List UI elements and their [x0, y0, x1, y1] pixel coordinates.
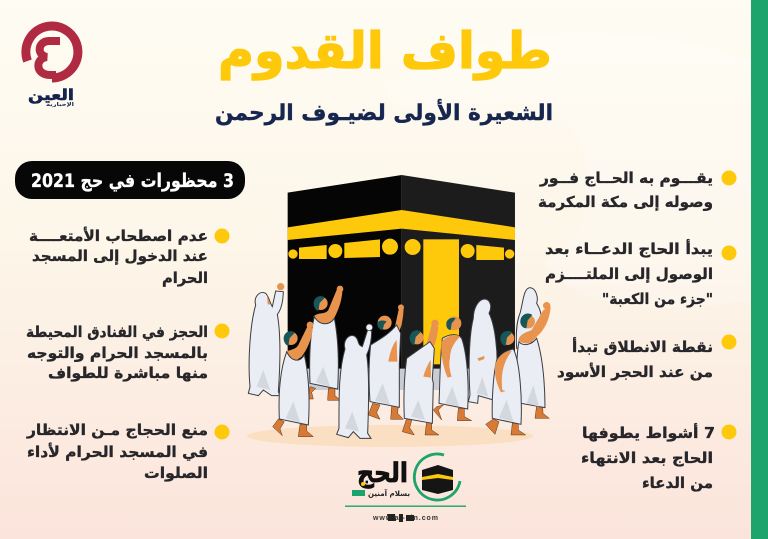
title: طواف القدوم — [218, 22, 552, 81]
step 4: 7 أشواط يطوفها — [582, 423, 715, 442]
step 2: "جزء من الكعبة" — [602, 290, 713, 308]
step 2: يبدأ الحاج الدعــاء بعد — [545, 239, 713, 258]
step 4 — [581, 423, 736, 492]
prohibition 3: منع الحجاج مـن الانتظار — [26, 421, 208, 439]
logo: Hajj safely: بسلام آمنين — [368, 488, 410, 498]
website address: www.al-ain.com — [372, 515, 438, 522]
pilgrim: woman waving — [337, 324, 373, 438]
prohibition 1: الحرام — [162, 269, 208, 287]
ground shadow — [247, 425, 533, 447]
panel: prohibitions heading — [15, 161, 245, 199]
prohibition 3: الصلوات — [144, 464, 208, 482]
pilgrim: bare shoulder right — [486, 331, 526, 435]
step 4: من الدعاء — [642, 474, 713, 492]
logo: Al-Ain: الإخبارية — [46, 102, 74, 108]
pilgrim: back woman — [516, 288, 542, 348]
prohibition 3: في المسجد الحرام لأداء — [27, 443, 208, 461]
logo: Al-Ain — [26, 26, 78, 108]
step 3: نقطة الانطلاق تبدأ — [572, 337, 713, 356]
prohibition 2 — [26, 323, 230, 382]
pilgrim: raised arm, belly showing — [368, 304, 404, 419]
pilgrim: standing woman — [468, 299, 497, 403]
prohibition 2: بالمسجد الحرام والتوجه — [27, 344, 208, 362]
step 3: من عند الحجر الأسود — [557, 363, 713, 381]
pilgrim: raised arm centre — [402, 320, 439, 435]
step 4: الحاج بعد الانتهاء — [581, 449, 713, 467]
subtitle: الشعيرة الأولى لضيـوف الرحمن — [215, 98, 553, 126]
panel: right steps list — [538, 169, 736, 492]
pilgrim: raised arm far right — [517, 302, 551, 418]
logo: Hajj safely: الحج — [357, 458, 408, 489]
prohibition 3 — [26, 421, 230, 482]
pilgrims: left group — [248, 283, 343, 437]
step 2: الوصول إلى الملتــــزم — [545, 265, 713, 283]
pilgrim: bare shoulder centre — [433, 316, 472, 421]
prohibition 1: عند الدخول إلى المسجد — [32, 247, 208, 265]
step 1: وصوله إلى مكة المكرمة — [538, 193, 713, 211]
logo: Hajj safely — [345, 454, 466, 507]
Kaaba — [288, 175, 515, 390]
prohibition 2: الحجز في الفنادق المحيطة — [26, 323, 208, 341]
green side band — [751, 0, 768, 539]
pilgrim: raised arm front — [273, 322, 313, 437]
panel: prohibitions heading: 3 محظورات في حج 2021 — [31, 170, 234, 192]
panel: left prohibitions list — [26, 227, 230, 482]
icon: crescent with Kaaba — [414, 454, 460, 500]
step 2 — [545, 239, 736, 308]
prohibition 1 — [29, 227, 230, 287]
pilgrim: raised arm back — [308, 286, 343, 400]
illustration: Kaaba and pilgrims — [247, 175, 551, 447]
pilgrims: middle group — [337, 304, 404, 438]
step 1: يقـــوم به الحــاج فــور — [539, 169, 713, 187]
pilgrim: woman far left — [248, 283, 284, 396]
prohibition 2: منها مباشرة للطواف — [48, 364, 208, 382]
step 3 — [557, 334, 736, 381]
pilgrims: right group — [402, 288, 551, 435]
prohibition 1: عدم اصطحاب الأمتعــــة — [29, 227, 208, 245]
logo: Al-Ain: العين — [28, 86, 74, 104]
step 1 — [538, 169, 736, 211]
